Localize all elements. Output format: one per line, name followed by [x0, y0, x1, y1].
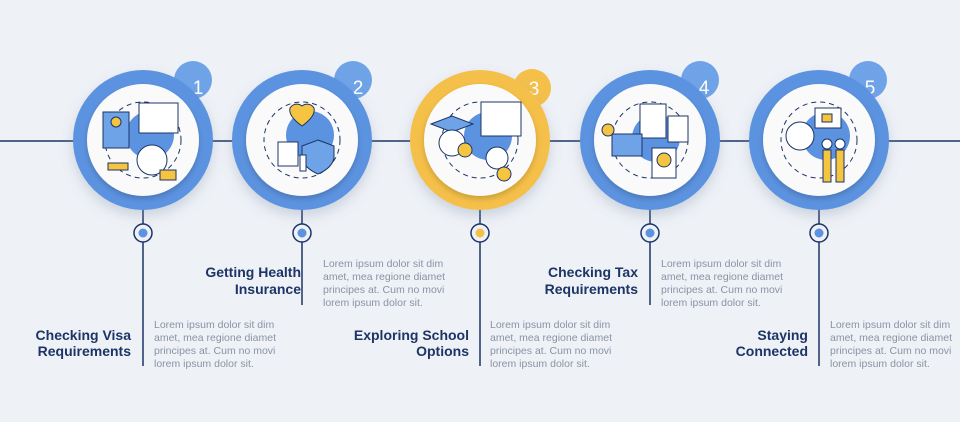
step 5 [736, 61, 952, 370]
desc 3: principes at. Cum no movi [490, 345, 611, 357]
badge 1: 1 [193, 78, 203, 99]
title 3 [354, 327, 469, 359]
title 3: Exploring School [354, 327, 469, 343]
desc 4 [661, 258, 783, 309]
title 1 [36, 327, 131, 359]
title 3: Options [416, 343, 469, 359]
node [810, 224, 828, 242]
icon: health [264, 102, 340, 178]
title 5: Staying [757, 327, 808, 343]
icon: connected [781, 102, 857, 182]
badge 4 [681, 61, 719, 99]
title 1: Requirements [38, 343, 131, 359]
step 1 [36, 61, 276, 370]
desc 3: Lorem ipsum dolor sit dim [490, 319, 610, 331]
badge 2 [334, 61, 372, 99]
desc 5: amet, mea regione diamet [830, 332, 952, 344]
title 5: Connected [736, 343, 808, 359]
icon: school [431, 102, 521, 181]
badge 5: 5 [865, 78, 875, 99]
desc 2: principes at. Cum no movi [323, 284, 444, 296]
desc 2 [323, 258, 445, 309]
desc 1: Lorem ipsum dolor sit dim [154, 319, 274, 331]
title 2: Getting Health [205, 264, 301, 280]
badge 4: 4 [699, 78, 710, 99]
node [134, 224, 152, 242]
badge 2: 2 [353, 78, 363, 99]
title 4 [545, 264, 638, 297]
badge 3 [513, 69, 551, 107]
desc 4: lorem ipsum dolor sit. [661, 297, 761, 309]
desc 3: lorem ipsum dolor sit. [490, 358, 590, 370]
desc 4: Lorem ipsum dolor sit dim [661, 258, 781, 270]
desc 5: Lorem ipsum dolor sit dim [830, 319, 950, 331]
desc 4: principes at. Cum no movi [661, 284, 782, 296]
title 4: Checking Tax [548, 264, 638, 280]
desc 5: lorem ipsum dolor sit. [830, 358, 930, 370]
step 4 [545, 61, 783, 309]
badge 3: 3 [529, 79, 539, 100]
desc 3: amet, mea regione diamet [490, 332, 612, 344]
node [471, 224, 489, 242]
desc 1: principes at. Cum no movi [154, 345, 275, 357]
title 5 [736, 327, 808, 359]
step 3 [354, 69, 612, 370]
timeline line [0, 140, 960, 142]
desc 2: Lorem ipsum dolor sit dim [323, 258, 443, 270]
desc 1 [154, 319, 276, 370]
desc 2: amet, mea regione diamet [323, 271, 445, 283]
desc 1: amet, mea regione diamet [154, 332, 276, 344]
badge 1 [174, 61, 212, 99]
desc 1: lorem ipsum dolor sit. [154, 358, 254, 370]
title 2 [205, 264, 301, 297]
desc 2: lorem ipsum dolor sit. [323, 297, 423, 309]
title 2: Insurance [235, 281, 301, 297]
desc 5 [830, 319, 952, 370]
desc 3 [490, 319, 612, 370]
icon: visa [103, 102, 181, 180]
node [293, 224, 311, 242]
icon: tax [602, 102, 688, 178]
badge 5 [849, 61, 887, 99]
desc 4: amet, mea regione diamet [661, 271, 783, 283]
title 1: Checking Visa [36, 327, 131, 343]
node [641, 224, 659, 242]
title 4: Requirements [545, 281, 638, 297]
step 2 [205, 61, 445, 309]
desc 5: principes at. Cum no movi [830, 345, 951, 357]
